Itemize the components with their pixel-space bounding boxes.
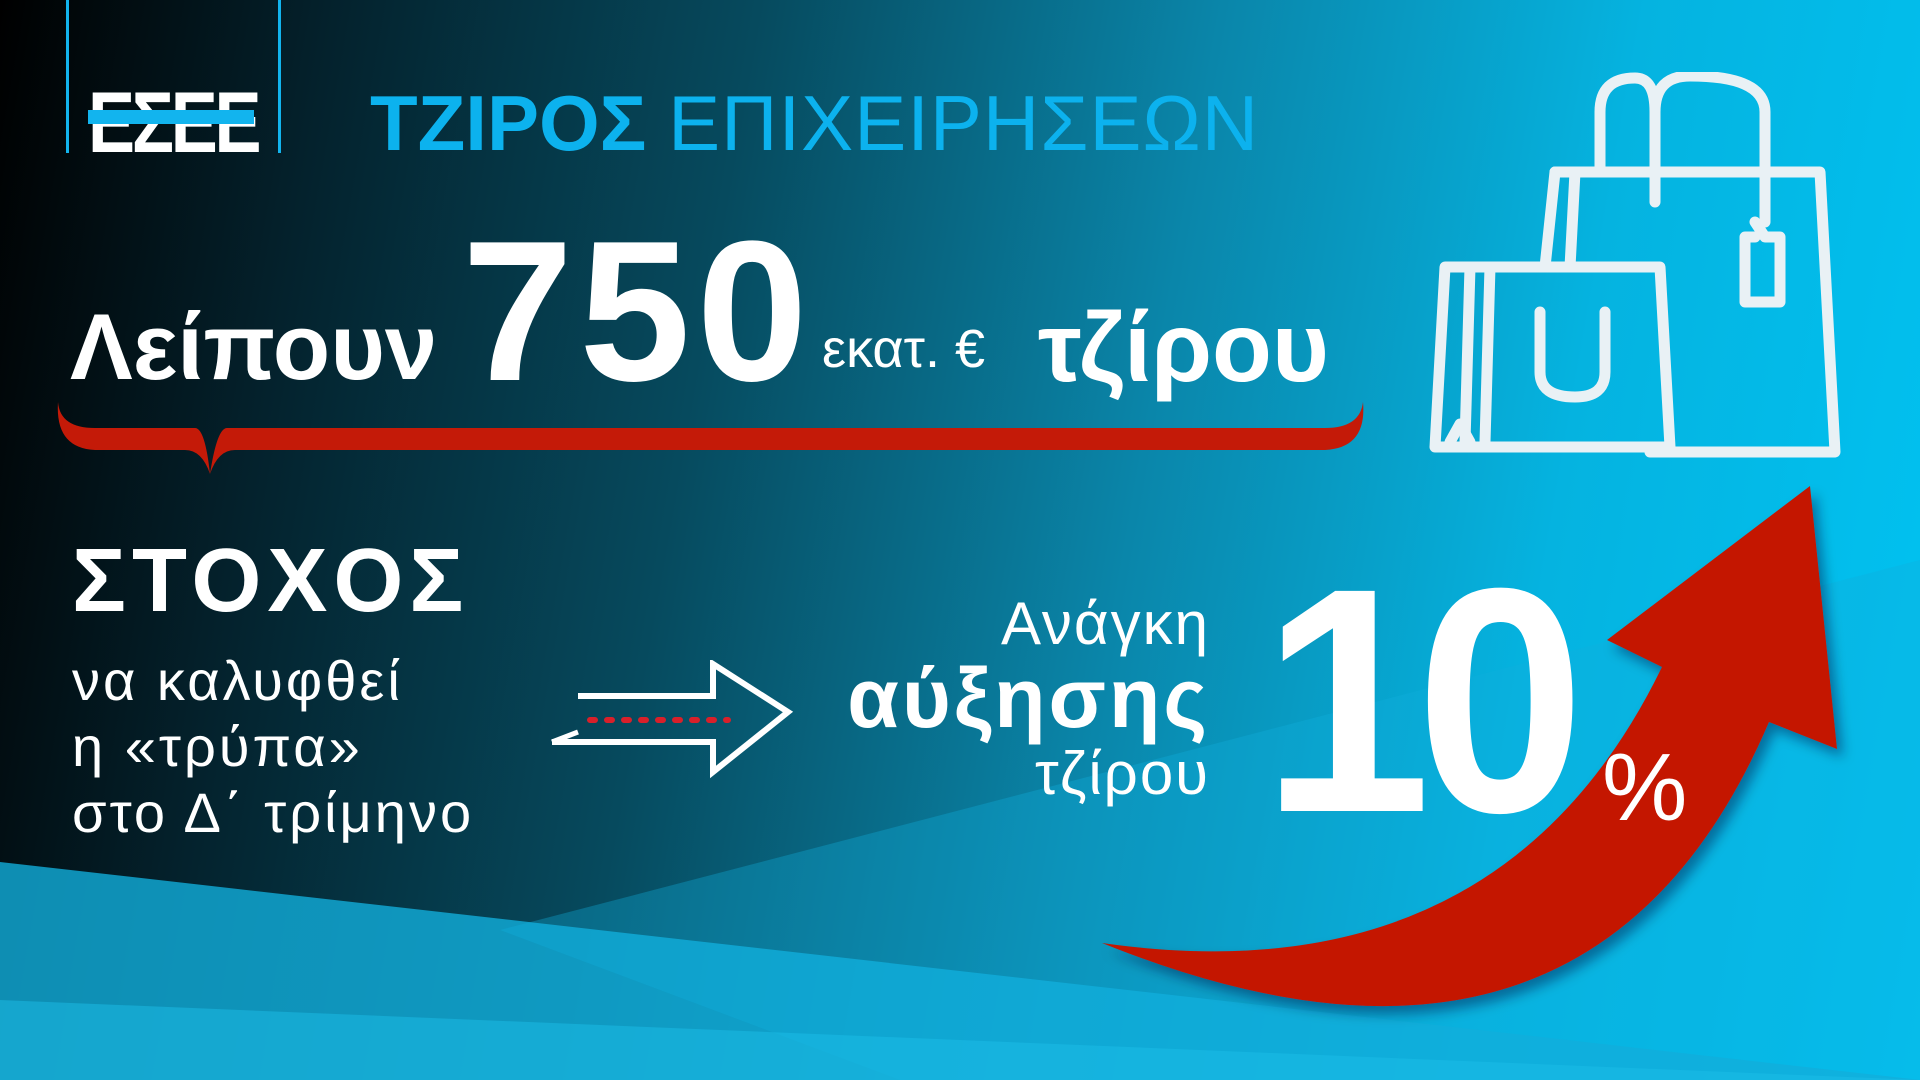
headline: missing 750 million: Λείπουν [70, 294, 437, 399]
need increase text: τζίρου [1035, 740, 1210, 807]
headline: missing 750 million [70, 200, 1329, 423]
red brace [58, 402, 1364, 474]
need increase text: αύξησης [847, 651, 1210, 745]
title: ΤΖΙΡΟΣ ΕΠΙΧΕΙΡΗΣΕΩΝ [370, 79, 1259, 167]
need increase text: Ανάγκη [1001, 590, 1210, 657]
need increase text [847, 590, 1210, 807]
10%: % [1602, 734, 1687, 841]
logo [66, 0, 281, 171]
headline: missing 750 million: 750 [462, 200, 814, 423]
logo: ΕΣΕΕ [88, 75, 258, 171]
target text: να καλυφθεί [72, 649, 403, 712]
target text: η «τρύπα» [72, 715, 363, 778]
target heading: ΣΤΟΧΟΣ [72, 531, 469, 631]
headline: missing 750 million: εκατ. € [822, 319, 985, 379]
arrow outline [551, 660, 794, 778]
icon: shopping bags [1430, 72, 1840, 458]
headline: missing 750 million: τζίρου [1038, 292, 1329, 402]
target text [72, 649, 474, 844]
target text: στο Δ΄ τρίμηνο [72, 781, 474, 844]
10%: 10 [1262, 521, 1570, 879]
